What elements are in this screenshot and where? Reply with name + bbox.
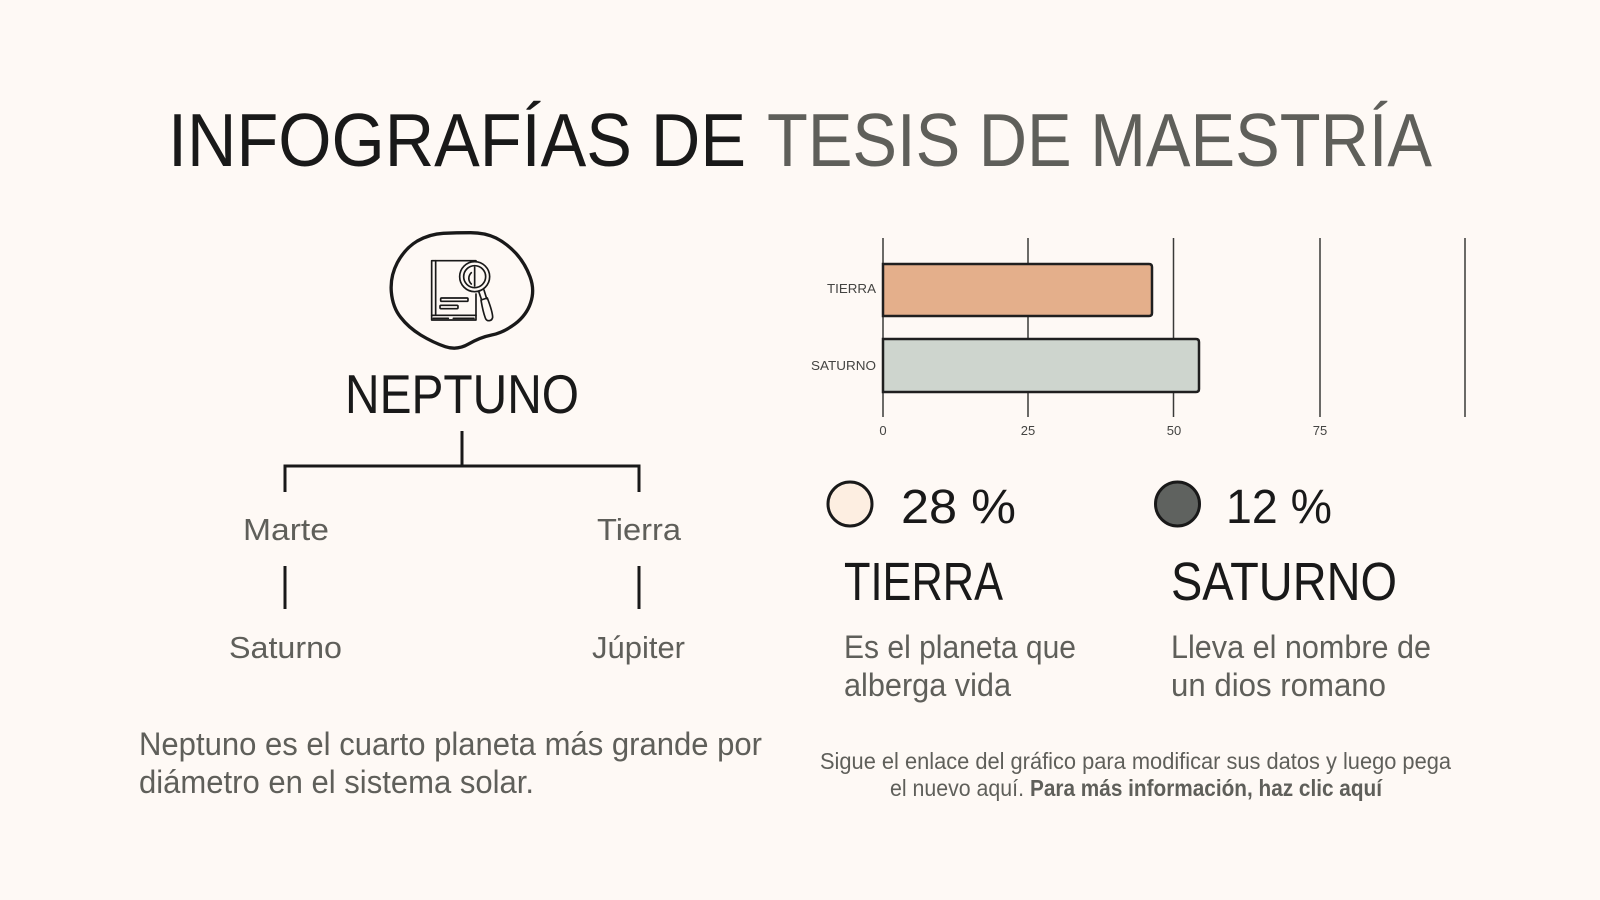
title: TESIS DE MAESTRÍA xyxy=(767,98,1432,182)
stat: 28 %: 28 % xyxy=(901,481,1016,534)
heading: Neptuno: NEPTUNO xyxy=(345,363,579,425)
text block: chart note: Para más información, haz clic aquí xyxy=(1030,775,1383,801)
axis labels: 25 xyxy=(1021,423,1035,438)
connector: tree branches xyxy=(285,431,639,609)
axis labels: SATURNO xyxy=(811,358,876,373)
axis labels: 0 xyxy=(879,423,887,438)
label: Saturno: Saturno xyxy=(229,630,342,665)
text block: Neptuno description: Neptuno es el cuarto planeta más grande por xyxy=(139,726,762,762)
text: Saturno description: un dios romano xyxy=(1171,667,1386,703)
text: Saturno description xyxy=(1171,629,1431,703)
panel: Saturno stat xyxy=(1156,481,1431,703)
bar: Tierra xyxy=(883,264,1152,316)
text: Tierra description: Es el planeta que xyxy=(844,629,1076,665)
title xyxy=(168,98,1432,182)
text block: Neptuno description: diámetro en el sistema solar. xyxy=(139,764,534,800)
panel: Tierra stat xyxy=(828,481,1076,703)
text block: chart note xyxy=(820,748,1451,801)
axis labels: 50 xyxy=(1167,423,1181,438)
axis labels: TIERRA xyxy=(827,281,876,296)
text block: Neptuno description xyxy=(139,726,762,800)
bar: Saturno xyxy=(883,339,1199,392)
text: Tierra description xyxy=(844,629,1076,703)
heading: Saturno: SATURNO xyxy=(1171,552,1397,612)
label: Tierra: Tierra xyxy=(597,512,682,547)
text: Saturno description: Lleva el nombre de xyxy=(1171,629,1431,665)
icon: legend dot Tierra xyxy=(828,482,872,526)
label: Marte: Marte xyxy=(243,512,329,547)
text block: chart note: el nuevo aquí. xyxy=(890,775,1024,801)
stat: 12 %: 12 % xyxy=(1226,481,1332,534)
icon: legend dot Saturno xyxy=(1156,482,1200,526)
title: INFOGRAFÍAS DE xyxy=(168,98,746,182)
bar chart xyxy=(811,238,1465,438)
panel: Neptuno hierarchy xyxy=(229,233,685,665)
heading: Tierra: TIERRA xyxy=(844,552,1003,612)
text: Tierra description: alberga vida xyxy=(844,667,1011,703)
axis labels xyxy=(811,281,1327,438)
label: Júpiter: Júpiter xyxy=(592,630,685,665)
text block: chart note: Sigue el enlace del gráfico para modificar sus datos y luego pega xyxy=(820,748,1451,774)
icon: book with magnifying glass in hand-drawn circle xyxy=(391,233,533,348)
axis labels: 75 xyxy=(1313,423,1327,438)
